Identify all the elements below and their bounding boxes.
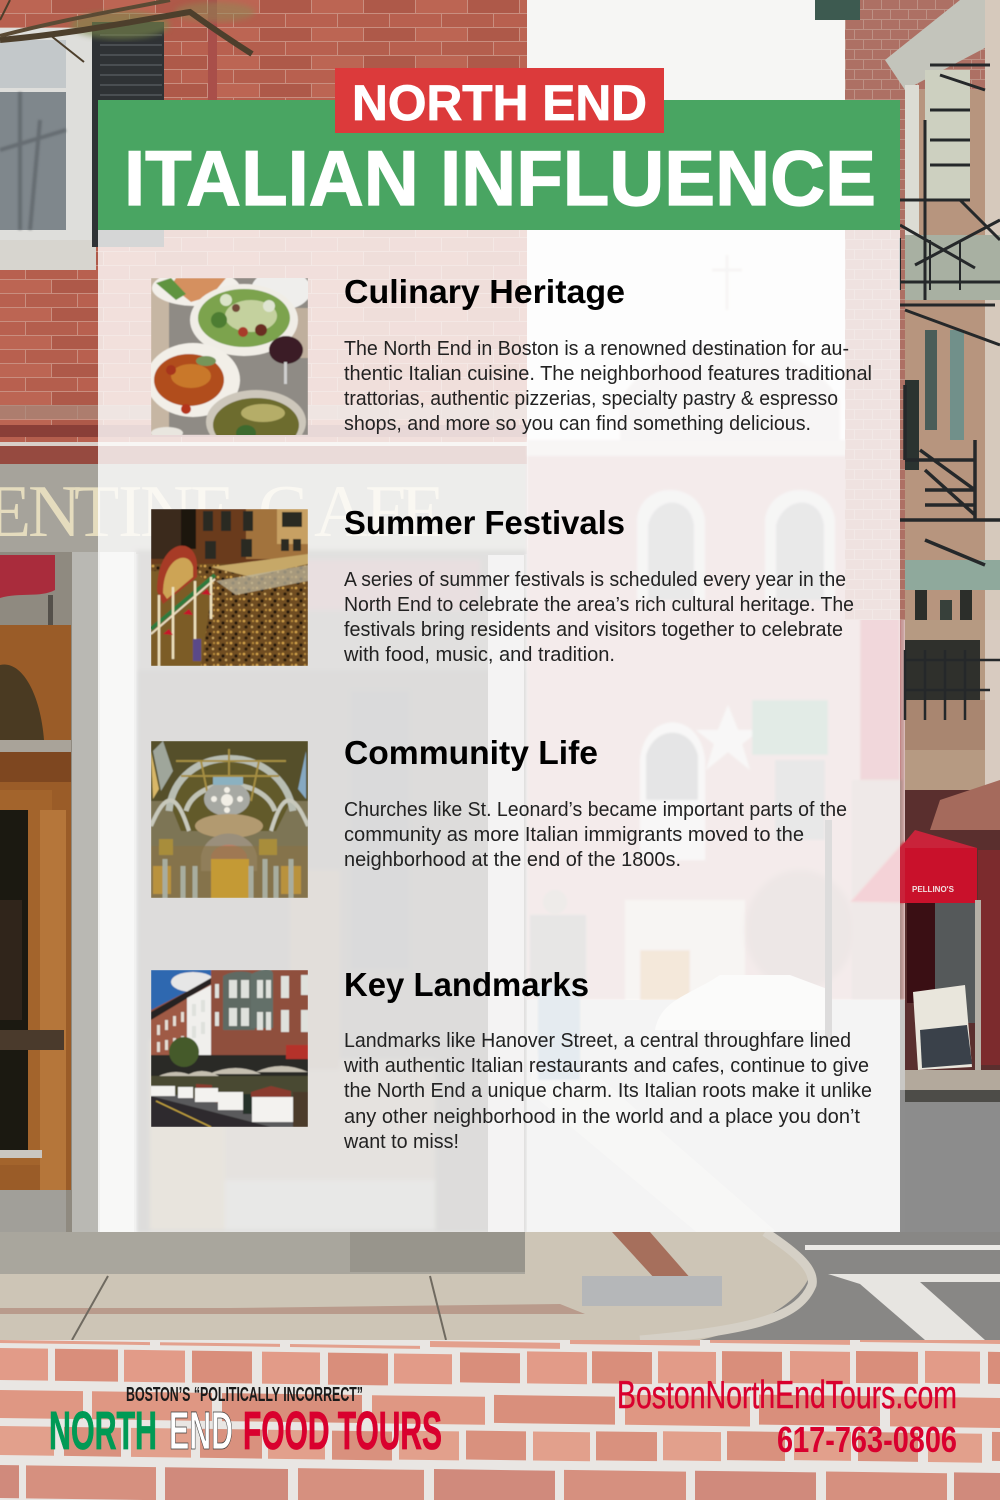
body text: The North End in Boston is a renowned destination for au-: [344, 338, 849, 360]
body text: any other neighborhood in the world and a place you don’t: [344, 1106, 860, 1128]
upper window: [0, 28, 96, 270]
body text: community as more Italian immigrants moved to the: [344, 824, 804, 846]
body text: want to miss!: [343, 1131, 459, 1153]
shop right pilaster: [488, 555, 524, 1235]
body text: neighborhood at the end of the 1800s.: [344, 849, 681, 871]
church in distance: [527, 255, 905, 1000]
tree branch: [0, 0, 255, 62]
body text: trattorias, authentic pizzerias, specialty pastry & espresso: [344, 388, 838, 410]
section: summer festivals: [151, 504, 854, 666]
body text: [343, 1030, 872, 1153]
storefront: [900, 780, 1000, 1232]
green title band: [98, 100, 900, 230]
stone pilaster: [0, 552, 74, 1242]
body text: Churches like St. Leonard’s became important parts of the: [344, 799, 847, 821]
body text: festivals bring residents and visitors together to celebrate: [344, 619, 843, 641]
fire escape: [900, 65, 1000, 720]
logo words: food tours: FOOD TOURS: [243, 1401, 442, 1461]
wooden door: [0, 625, 71, 1232]
title banner: [98, 68, 900, 230]
parked car: [655, 975, 830, 1030]
sidewalk and curb: [0, 1232, 1000, 1340]
photo: festival crowd: [151, 509, 308, 666]
body text: the North End a unique charm. Its Italian roots make it unlike: [344, 1080, 872, 1102]
section: culinary heritage: [146, 270, 872, 454]
heading: Community Life: [344, 734, 598, 771]
drainpipe: [208, 0, 217, 100]
window shutter: [92, 22, 164, 247]
body text: [343, 569, 854, 666]
body text: Landmarks like Hanover Street, a central throughfare lined: [344, 1030, 851, 1052]
body text: North End to celebrate the area’s rich cultural heritage. The: [344, 594, 854, 616]
stone sign band: [0, 464, 527, 554]
red awning: [0, 555, 55, 598]
logo tagline: BOSTON’S “POLITICALLY INCORRECT”: [126, 1384, 363, 1406]
translucent white content panel: [98, 230, 900, 1232]
title: north end: NORTH END: [352, 75, 647, 131]
road inside panel area: [527, 1000, 907, 1240]
shop front dark: [136, 550, 527, 1234]
red label box: [335, 68, 664, 133]
body text: thentic Italian cuisine. The neighborhood features traditional: [344, 363, 872, 385]
heading: Culinary Heritage: [344, 273, 625, 310]
body text: [344, 338, 872, 435]
body text: [344, 799, 847, 871]
street: [640, 1090, 1000, 1340]
heading: Key Landmarks: [344, 966, 589, 1003]
title: italian influence: ITALIAN INFLUENCE: [124, 134, 876, 222]
phone number: 617-763-0806: [777, 1419, 957, 1460]
restaurant sign text: PELLINO'S: [912, 885, 955, 894]
body text: shops, and more so you can find something delicious.: [344, 413, 811, 435]
section: key landmarks: [151, 966, 872, 1153]
logo: north end food tours: [49, 1384, 442, 1461]
photo: church interior: [151, 741, 308, 898]
body text: with authentic Italian restaurants and cafes, continue to give: [343, 1055, 869, 1077]
footer brick band: [0, 1340, 1000, 1500]
body text: A series of summer festivals is scheduled every year in the: [344, 569, 846, 591]
logo word: end: END: [169, 1401, 233, 1461]
pedestrian: [530, 890, 586, 1080]
photo: italian dishes: [151, 278, 308, 435]
logo word: north: NORTH: [49, 1401, 157, 1461]
lamp post: [825, 820, 832, 1040]
body text: with food, music, and tradition.: [343, 644, 615, 666]
section: community life: [151, 734, 847, 898]
brick facade left: [0, 0, 527, 465]
photo: hanover street: [151, 970, 308, 1127]
heading: Summer Festivals: [344, 504, 625, 541]
contact details: [617, 1374, 957, 1460]
right building: [815, 0, 1000, 790]
